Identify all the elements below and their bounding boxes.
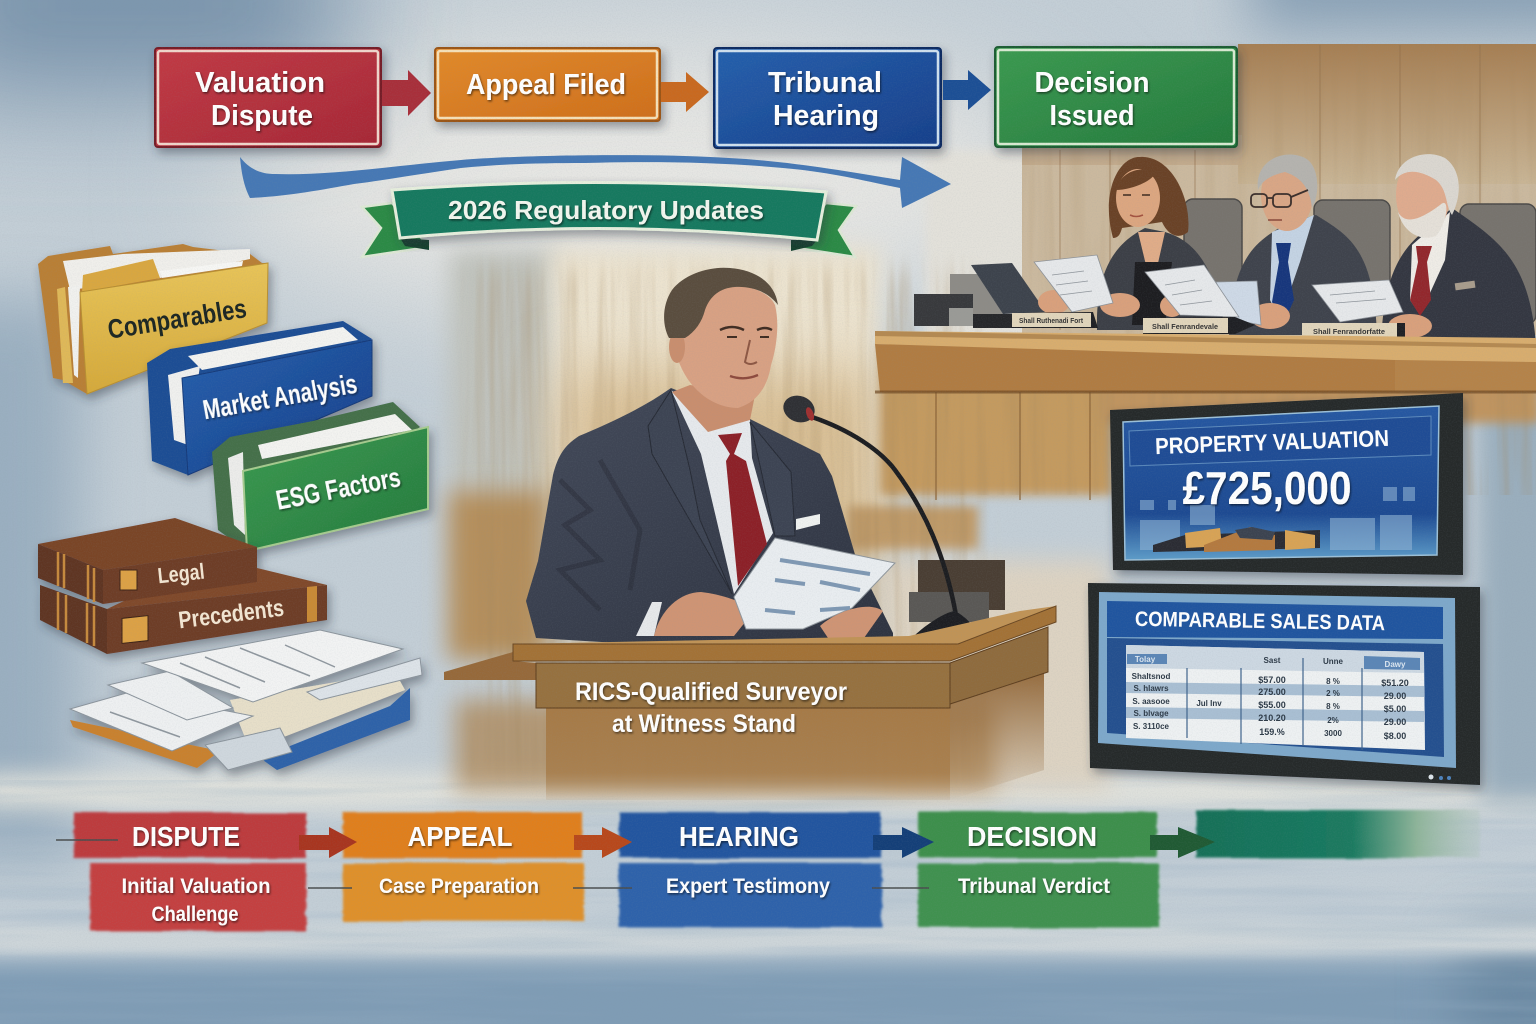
data table: S. blvage: [1133, 709, 1169, 718]
arrow: appeal to hearing: [661, 72, 709, 112]
name plates: Shall Ruthenadi Fort: [1019, 318, 1084, 325]
lower book: [40, 565, 327, 654]
coloured boxes: [74, 810, 1480, 931]
banner: 2026 Regulatory Updates: [362, 182, 856, 257]
podium caption: at Witness Stand: [612, 710, 796, 738]
folder: ESG Factors: [212, 402, 428, 551]
hands and document: [636, 538, 895, 638]
step: Valuation Dispute: Valuation: [195, 67, 325, 99]
stage: hearing: Expert Testimony: [666, 875, 830, 898]
property valuation text: PROPERTY VALUATION: [1155, 425, 1389, 459]
stage: appeal: Case Preparation: [379, 875, 539, 898]
tribunal wall panelling: [1022, 150, 1536, 335]
lower book: Precedents: [177, 595, 285, 634]
screen: comparable sales data: [1088, 583, 1480, 785]
data table: Shaltsnod: [1132, 672, 1170, 681]
data table: S. 3110ce: [1133, 722, 1170, 731]
stage: decision: [958, 821, 1110, 898]
arrow: dispute to appeal: [382, 70, 431, 116]
folder: ESG Factors: ESG Factors: [273, 461, 403, 516]
stage: appeal: [379, 821, 539, 898]
top flow chart: [155, 47, 1237, 148]
panel member: woman: [1097, 157, 1225, 330]
central wood wall: [440, 240, 1110, 800]
panel member: bearded man: [1381, 154, 1536, 345]
podium caption: RICS-Qualified Surveyor: [575, 678, 847, 706]
data table: $57.00: [1258, 675, 1286, 685]
chairs: [1184, 199, 1536, 324]
stage: decision: DECISION: [967, 821, 1097, 852]
stack of papers: [70, 630, 422, 770]
lapels: [648, 390, 795, 594]
data table: Tolay: [1135, 655, 1156, 664]
bottom process strip: [56, 810, 1480, 931]
panel member: man with glasses: [1229, 155, 1377, 335]
banner: 2026 Regulatory Updates: 2026 Regulatory Updates: [448, 195, 764, 225]
step: Decision Issued: [995, 47, 1237, 147]
curved timeline arrow: [240, 155, 951, 208]
building illustration: [1153, 527, 1320, 552]
name plates: Shall Fenrandevale: [1152, 324, 1218, 331]
step: Tribunal Hearing: [714, 48, 941, 148]
stage: hearing: [666, 821, 830, 898]
data table: 8 %: [1326, 677, 1340, 686]
neck and head: [672, 385, 755, 432]
step: Appeal Filed: [435, 48, 660, 121]
folder: Comparables: Comparables: [106, 293, 249, 345]
connector lines: [56, 840, 929, 888]
witness: surveyor: [526, 268, 895, 645]
folder: Comparables: [38, 244, 268, 394]
data table: S. hlawrs: [1133, 684, 1169, 693]
stage: appeal: APPEAL: [408, 821, 512, 852]
upper book: [38, 518, 257, 604]
comparable sales heading: COMPARABLE SALES DATA: [1135, 608, 1385, 635]
microphone: [780, 391, 1005, 637]
stage: dispute: Initial Valuation: [122, 875, 270, 898]
step: Tribunal Hearing: Tribunal: [768, 67, 882, 99]
arrow: appeal to hearing: [574, 827, 632, 858]
step: Tribunal Hearing: Hearing: [773, 100, 879, 132]
data table: $8.00: [1384, 731, 1406, 741]
pale wall behind panel: [925, 150, 1035, 340]
valuation amount: £725,000: [1182, 462, 1352, 514]
suit folds: [560, 460, 640, 610]
judges desk: [875, 331, 1536, 392]
data table: Dawy: [1385, 660, 1406, 669]
status lights: [1428, 774, 1451, 780]
data table: 29.00: [1384, 691, 1406, 701]
arrow: dispute to appeal: [299, 827, 357, 858]
data table: 2 %: [1326, 689, 1340, 698]
window blocks: [1140, 487, 1415, 550]
data table: Jul Inv: [1196, 699, 1222, 708]
arrow: hearing to decision: [943, 70, 991, 110]
name plates: Shall Fenrandorfatte: [1313, 329, 1385, 336]
tie: [718, 433, 767, 586]
arrow: hearing to decision: [873, 827, 934, 858]
podium caption: [575, 678, 847, 738]
data table: 159.%: [1259, 727, 1285, 737]
torso and suit: [526, 388, 893, 645]
tribunal panel: [875, 154, 1536, 392]
tablet and desk equipment: [914, 263, 1046, 328]
data table: $5.00: [1384, 704, 1406, 714]
step: Decision Issued: Decision: [1034, 67, 1150, 99]
witness stand podium: [444, 606, 1056, 800]
step: Valuation Dispute: [155, 48, 381, 147]
data table: Sast: [1264, 656, 1281, 665]
lower wood below desk: [880, 345, 1536, 500]
data table: $51.20: [1381, 678, 1409, 688]
data table: [1126, 645, 1425, 750]
data table: 275.00: [1258, 687, 1286, 697]
data table: S. aasooe: [1132, 697, 1170, 706]
stage: hearing: HEARING: [679, 821, 799, 852]
upper book: Legal: [156, 559, 206, 588]
stage: decision: Tribunal Verdict: [958, 875, 1110, 898]
hands: [1038, 290, 1432, 338]
shirt: [671, 390, 773, 594]
step: Valuation Dispute: Dispute: [211, 100, 313, 132]
data table: $55.00: [1258, 700, 1286, 710]
books: legal precedents: [38, 518, 327, 654]
step: Appeal Filed: Appeal Filed: [466, 69, 626, 101]
folder: Market Analysis: Market Analysis: [200, 368, 359, 425]
stage: dispute: Challenge: [152, 903, 238, 926]
arrow: decision to outcome: [1150, 827, 1215, 858]
data table: 210.20: [1258, 713, 1286, 723]
name plates: [1012, 312, 1405, 339]
screen: property valuation: [1110, 393, 1463, 575]
step: Decision Issued: Issued: [1050, 100, 1134, 132]
stage: dispute: [122, 821, 270, 926]
data table: 3000: [1324, 729, 1342, 738]
stage: dispute: DISPUTE: [132, 821, 240, 852]
folder: Market Analysis: [147, 321, 372, 475]
data table: 29.00: [1384, 717, 1406, 727]
documents held by panel: [1034, 255, 1403, 325]
data table: Unne: [1323, 657, 1344, 666]
data table: 8 %: [1326, 702, 1340, 711]
data table: 2%: [1327, 716, 1339, 725]
pocket square: [796, 514, 820, 530]
